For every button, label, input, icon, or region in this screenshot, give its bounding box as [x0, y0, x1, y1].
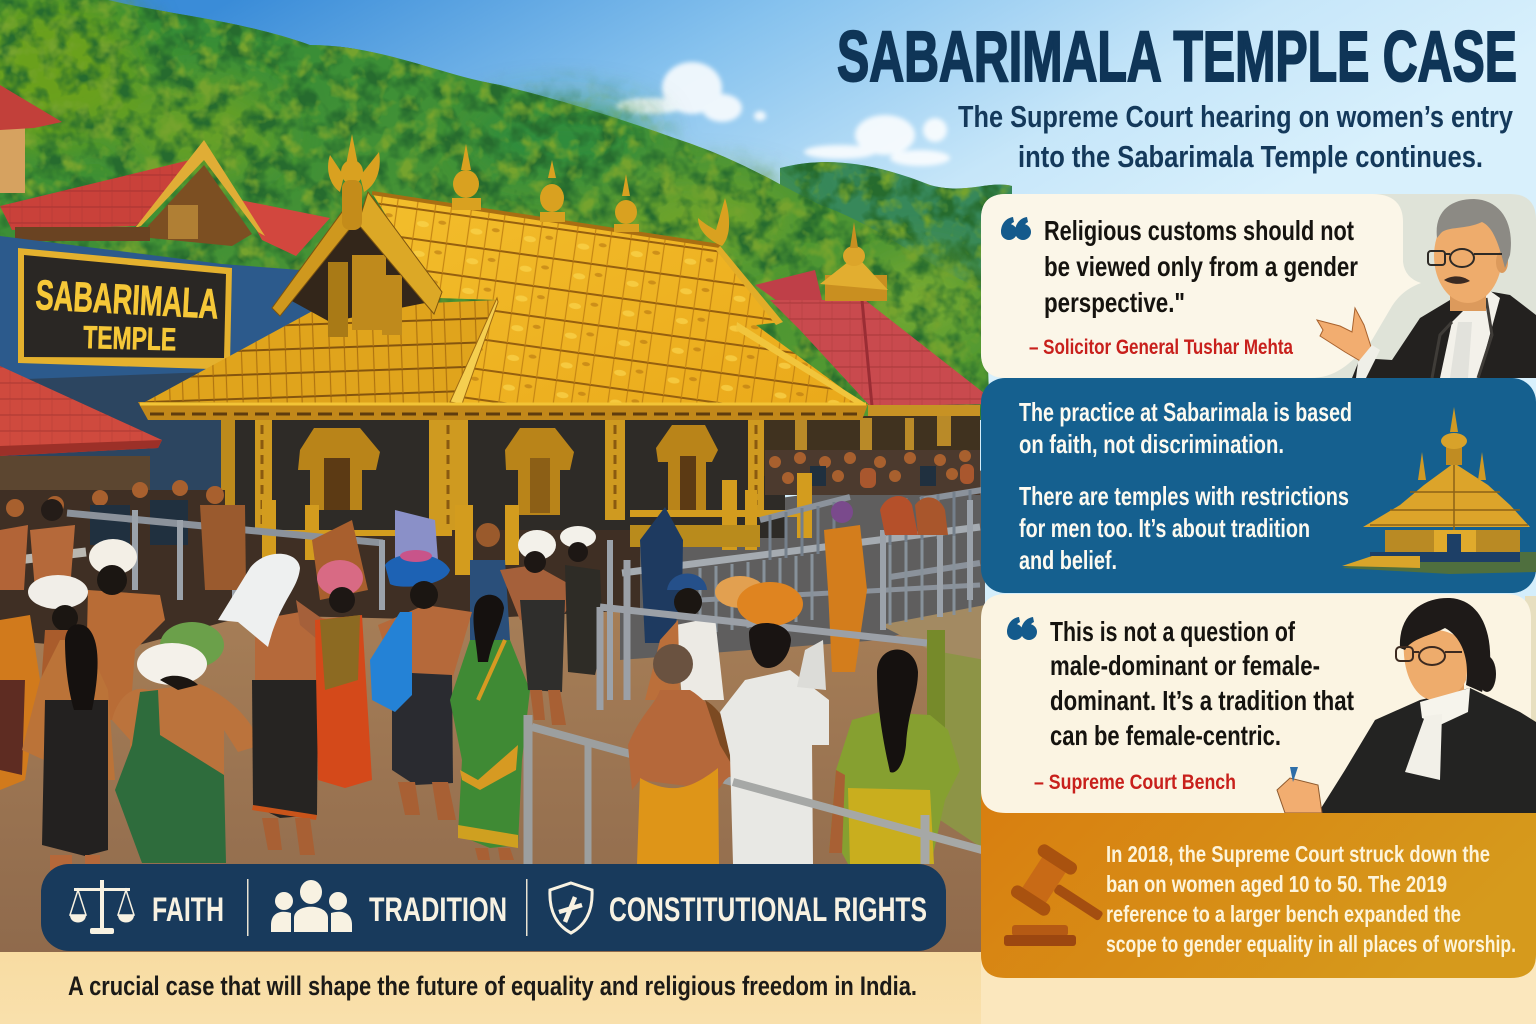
pilgrim: bald man in saffron	[628, 644, 738, 864]
body text: ban on women aged 10 to 50. The 2019	[1106, 871, 1447, 897]
front fence rail over pilgrims	[733, 782, 982, 864]
distant crowd	[0, 450, 980, 650]
back standing pilgrims	[0, 496, 948, 672]
icon: quotation mark	[1007, 617, 1037, 640]
icon: shield	[550, 883, 592, 933]
pilgrim behind: white shirt, blue cap	[645, 574, 724, 700]
panel: bench quote	[981, 594, 1536, 813]
lower right yard	[880, 605, 985, 660]
back pillars right	[795, 416, 951, 468]
temple front pillars	[221, 420, 764, 535]
pilgrim: man with blue bag	[370, 550, 472, 820]
temple dark hall	[225, 418, 785, 538]
wall sign: TEMPLE	[83, 319, 177, 357]
icon: gavel	[1004, 842, 1118, 946]
temple doorways	[298, 425, 718, 515]
quote text: perspective."	[1044, 287, 1185, 318]
ground	[0, 500, 985, 955]
quote text	[1044, 215, 1358, 318]
pilgrim: woman in yellow and green sari	[829, 650, 960, 864]
figure: woman judge	[1277, 598, 1536, 813]
right mid fence	[600, 560, 927, 710]
keyword bar	[41, 864, 946, 951]
clouds	[616, 62, 950, 166]
left tower with red roof	[0, 85, 62, 193]
body text: on faith, not discrimination.	[1019, 429, 1284, 459]
pilgrim: woman in orange	[315, 560, 372, 788]
front fence	[528, 715, 740, 864]
body text: The practice at Sabarimala is based	[1019, 397, 1352, 427]
blue wall	[0, 236, 320, 520]
icon: quotation mark	[1001, 217, 1031, 240]
bottom caption strip	[0, 952, 985, 1024]
quote text: This is not a question of	[1050, 616, 1296, 647]
red roofs behind the sign	[0, 140, 330, 256]
pilgrim: man with dark dhoti	[500, 526, 603, 725]
left red porch roof	[0, 366, 162, 506]
lower dark wall shade	[0, 372, 225, 520]
wall sign	[18, 248, 232, 369]
figure: solicitor general	[1317, 199, 1536, 378]
quote text: dominant. It’s a tradition that	[1050, 685, 1354, 716]
body text: and belief.	[1019, 545, 1117, 575]
temple finials	[328, 134, 729, 246]
quote text: can be female-centric.	[1050, 720, 1281, 751]
right back fence yard	[620, 470, 985, 660]
grass patch right	[925, 625, 985, 850]
pilgrim: woman in green sari	[450, 595, 530, 860]
body text	[1019, 397, 1352, 575]
back fences	[0, 490, 982, 700]
orange corner behind bench quote	[981, 780, 1041, 830]
temple front gable	[272, 190, 442, 337]
label: constitutional rights: CONSTITUTIONAL RIGHTS	[609, 891, 927, 929]
right column lower background	[981, 960, 1536, 1024]
far hill	[780, 162, 1012, 330]
pilgrim: man with green cloth	[112, 622, 261, 863]
label: tradition: TRADITION	[369, 891, 507, 929]
quote text: be viewed only from a gender	[1044, 251, 1358, 282]
golden temple roof	[138, 193, 868, 420]
pilgrims left back	[0, 539, 165, 790]
panel edge tone	[1525, 596, 1536, 816]
caption: A crucial case that will shape the future of equality and religious freedom in India.	[68, 971, 917, 1001]
icon: people	[271, 880, 352, 932]
bamboo post	[927, 630, 945, 800]
attribution: – Solicitor General Tushar Mehta	[1029, 336, 1293, 359]
body text: for men too. It’s about tradition	[1019, 513, 1310, 543]
right red roofs and gold tower	[755, 222, 998, 416]
quote text: Religious customs should not	[1044, 215, 1354, 246]
speech bubble	[981, 194, 1421, 378]
label: faith: FAITH	[152, 891, 224, 929]
subtitle	[958, 99, 1514, 174]
icon: scales of justice	[70, 880, 134, 934]
quote text: male-dominant or female-	[1050, 650, 1320, 681]
body text	[1106, 841, 1516, 957]
panel: faith argument	[981, 378, 1536, 593]
body text: There are temples with restrictions	[1019, 481, 1349, 511]
pilgrim: man with white towel	[218, 554, 338, 855]
pilgrim: man in white with orange turban	[715, 576, 829, 864]
quote text	[1050, 616, 1354, 751]
attribution: – Supreme Court Bench	[1034, 771, 1236, 794]
illustration: mini temple	[1342, 407, 1536, 574]
sky background	[0, 0, 1536, 400]
pilgrim: woman in black	[22, 624, 115, 872]
panel: solicitor general quote	[981, 194, 1536, 378]
wall sign: SABARIMALA	[35, 271, 220, 328]
gold barrier posts in front of temple	[262, 473, 812, 575]
forest hillside	[0, 0, 990, 420]
back hall right	[760, 416, 980, 476]
panel: legal background	[981, 813, 1536, 978]
